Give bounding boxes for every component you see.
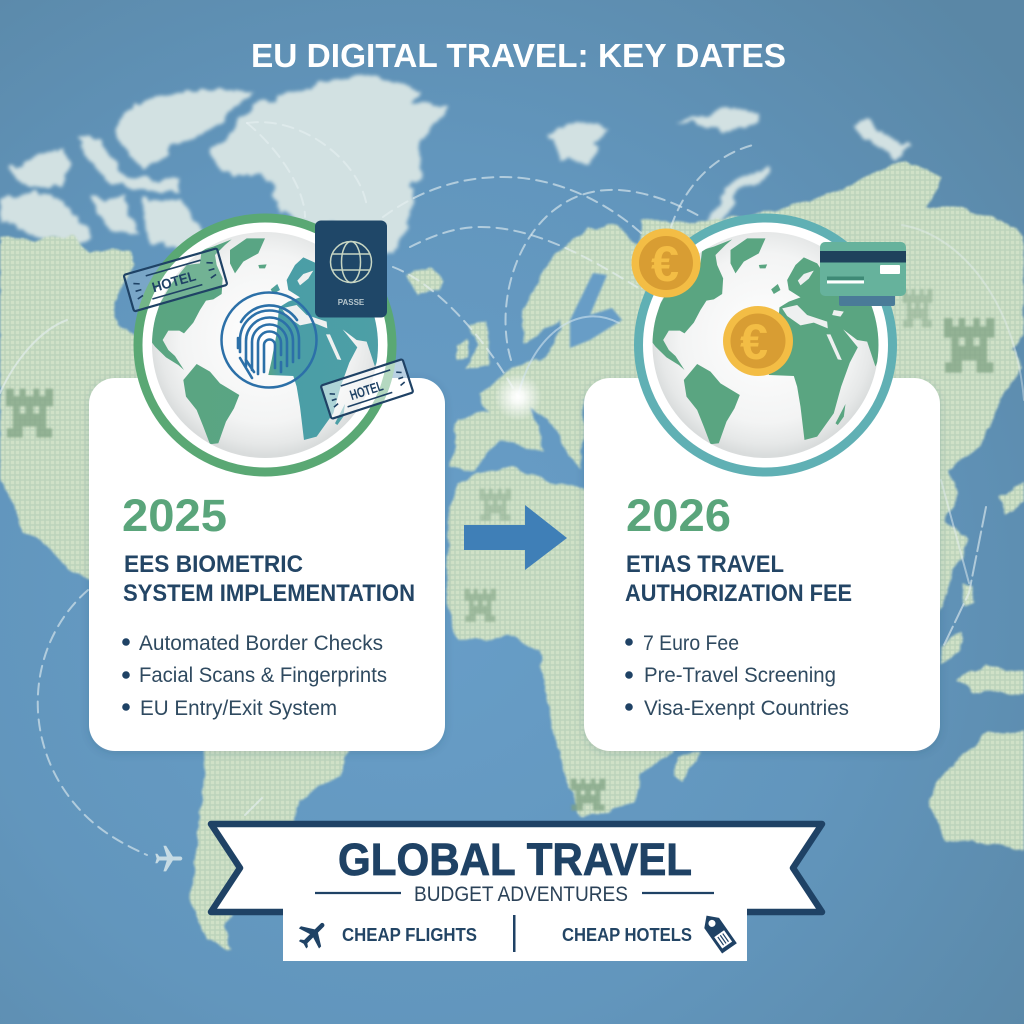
globe: EES [138,218,392,472]
globe: ETIAS [638,218,892,472]
bullet list: EU Entry/Exit System [140,697,337,720]
bullet list: Automated Border Checks [139,632,383,655]
panel: 2025 EES [89,378,445,751]
icon: hotel stamp bottom: HOTEL [348,377,385,403]
bullet list [122,632,387,720]
icon: euro coin top: € [651,236,679,292]
icon: hotel stamp top [124,248,227,311]
icon: ghost plane [155,846,182,871]
heading: EES: EES BIOMETRIC [124,551,303,578]
Baltic sea [570,273,622,348]
card background [89,378,445,751]
icon: passport: PASSE [338,298,365,307]
icon: passport [315,220,387,318]
panel: 2026 ETIAS [584,378,940,751]
bullet list: Facial Scans & Fingerprints [139,664,387,687]
bullet list: Visa-Exenpt Countries [644,697,849,720]
icon: euro coin centre [723,306,793,376]
banner [211,824,822,961]
arrow [464,505,567,570]
land masses [0,160,1024,952]
bullet list: 7 Euro Fee [643,632,739,655]
icon: hotel stamp top: HOTEL [150,267,198,295]
ribbon [211,824,822,912]
title: EU DIGITAL TRAVEL: KEY DATES [251,37,786,74]
icon: euro coin centre: € [740,314,768,370]
subtitle rules [315,892,714,894]
bullet list: Pre-Travel Screening [644,664,836,687]
divider [513,915,516,952]
icon: credit card [820,242,906,306]
icon: hotel tag [699,910,737,954]
icon: plane [292,913,334,955]
icon: hotel stamp bottom [321,359,413,419]
cheap hotels label: CHEAP HOTELS [562,925,692,945]
icon: fingerprint [222,292,316,388]
glow hub [494,373,542,421]
banner subtitle: BUDGET ADVENTURES [414,883,628,906]
castle landmarks [6,289,994,811]
cheap flights label: CHEAP FLIGHTS [342,925,477,945]
arctic islands and Greenland [0,75,909,257]
bullet list [625,632,849,720]
heading: ETIAS: AUTHORIZATION FEE [625,580,852,607]
year 2026: 2026 [626,490,731,541]
year 2025: 2025 [122,490,227,541]
white lower panel [283,908,747,961]
card background [584,378,940,751]
heading: EES: SYSTEM IMPLEMENTATION [123,580,415,607]
icon: euro coin top [632,228,700,298]
dashed flight routes [0,122,1024,855]
heading: ETIAS: ETIAS TRAVEL [626,551,784,578]
banner title: GLOBAL TRAVEL [338,834,692,885]
